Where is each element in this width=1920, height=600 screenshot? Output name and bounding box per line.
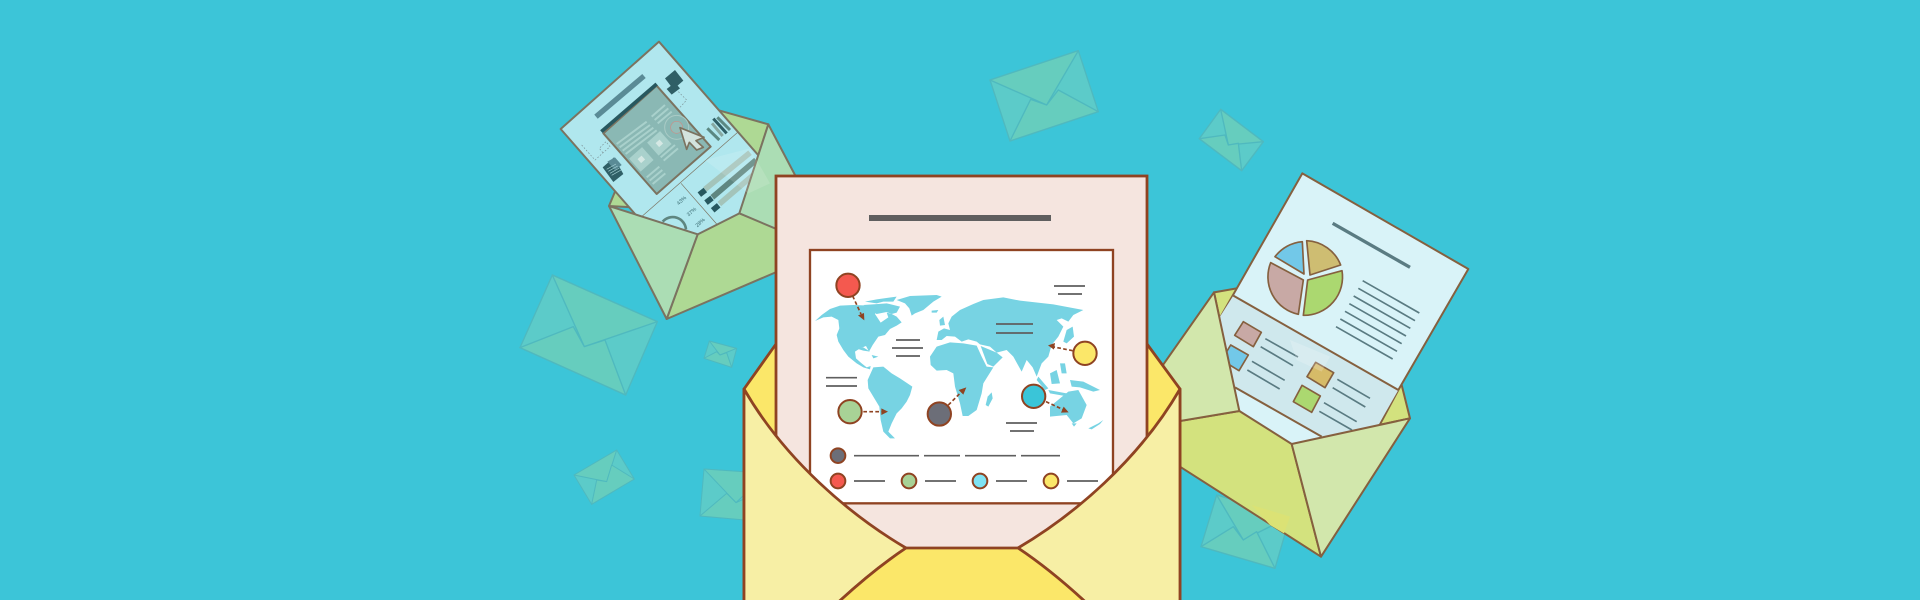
percentages <box>676 195 707 229</box>
left envelope lower flap <box>667 213 820 319</box>
report paper <box>1215 173 1468 450</box>
report title bar <box>1333 223 1410 267</box>
dashed connector lines <box>582 92 687 160</box>
map marker circles <box>836 274 1097 426</box>
ghost tint over envelope <box>1252 505 1290 533</box>
left envelope left flap <box>609 206 698 319</box>
horizontal bars <box>699 153 756 210</box>
left newsletter paper <box>561 42 763 240</box>
world map <box>815 295 1103 438</box>
icon: dark envelopes <box>665 70 683 95</box>
right green envelope with report <box>1127 173 1468 557</box>
icon: document <box>603 157 623 182</box>
right envelope lower flap <box>1127 411 1321 557</box>
screenshot panel <box>601 84 711 194</box>
dashed arrows <box>853 296 1073 412</box>
arrowheads <box>858 313 1069 415</box>
ghost envelope: below right <box>1201 495 1290 568</box>
ghost envelope: tiny left <box>704 341 737 367</box>
ghost envelope: behind main envelope <box>700 469 767 522</box>
right envelope back flap <box>1214 288 1410 444</box>
main envelope bottom flap <box>830 548 1094 600</box>
pie chart <box>1268 241 1343 315</box>
dividers <box>642 133 737 224</box>
main envelope right flap <box>1018 389 1180 600</box>
percentages: 37% <box>686 206 698 218</box>
map text lines <box>826 286 1085 431</box>
percentages: 28% <box>695 217 707 229</box>
map panel <box>810 250 1113 503</box>
icon: mouse pointer <box>680 128 704 150</box>
letter title bar <box>869 215 1051 221</box>
report legend squares <box>1222 322 1334 412</box>
ghost envelope: top centre <box>990 51 1098 141</box>
report text lines <box>1247 281 1419 430</box>
main letter paper <box>776 176 1147 576</box>
right envelope left flap <box>1127 292 1239 430</box>
bar chart icon <box>707 117 730 140</box>
donut chart <box>663 217 686 229</box>
ghost envelope: large left <box>520 275 657 395</box>
right envelope right flap <box>1292 418 1410 557</box>
left green envelope with newsletter <box>561 42 820 319</box>
pale ghost over flap <box>705 148 770 193</box>
main envelope left flap <box>744 389 906 600</box>
left envelope back flap <box>609 111 768 213</box>
ghost envelope: top right small <box>1199 109 1263 171</box>
main envelope back flap <box>744 344 1180 600</box>
legend <box>831 448 1098 488</box>
percentages: 43% <box>676 195 688 207</box>
ghost envelope: small lower left <box>574 450 634 504</box>
left envelope right flap <box>739 124 817 233</box>
report lower band <box>1220 296 1398 437</box>
